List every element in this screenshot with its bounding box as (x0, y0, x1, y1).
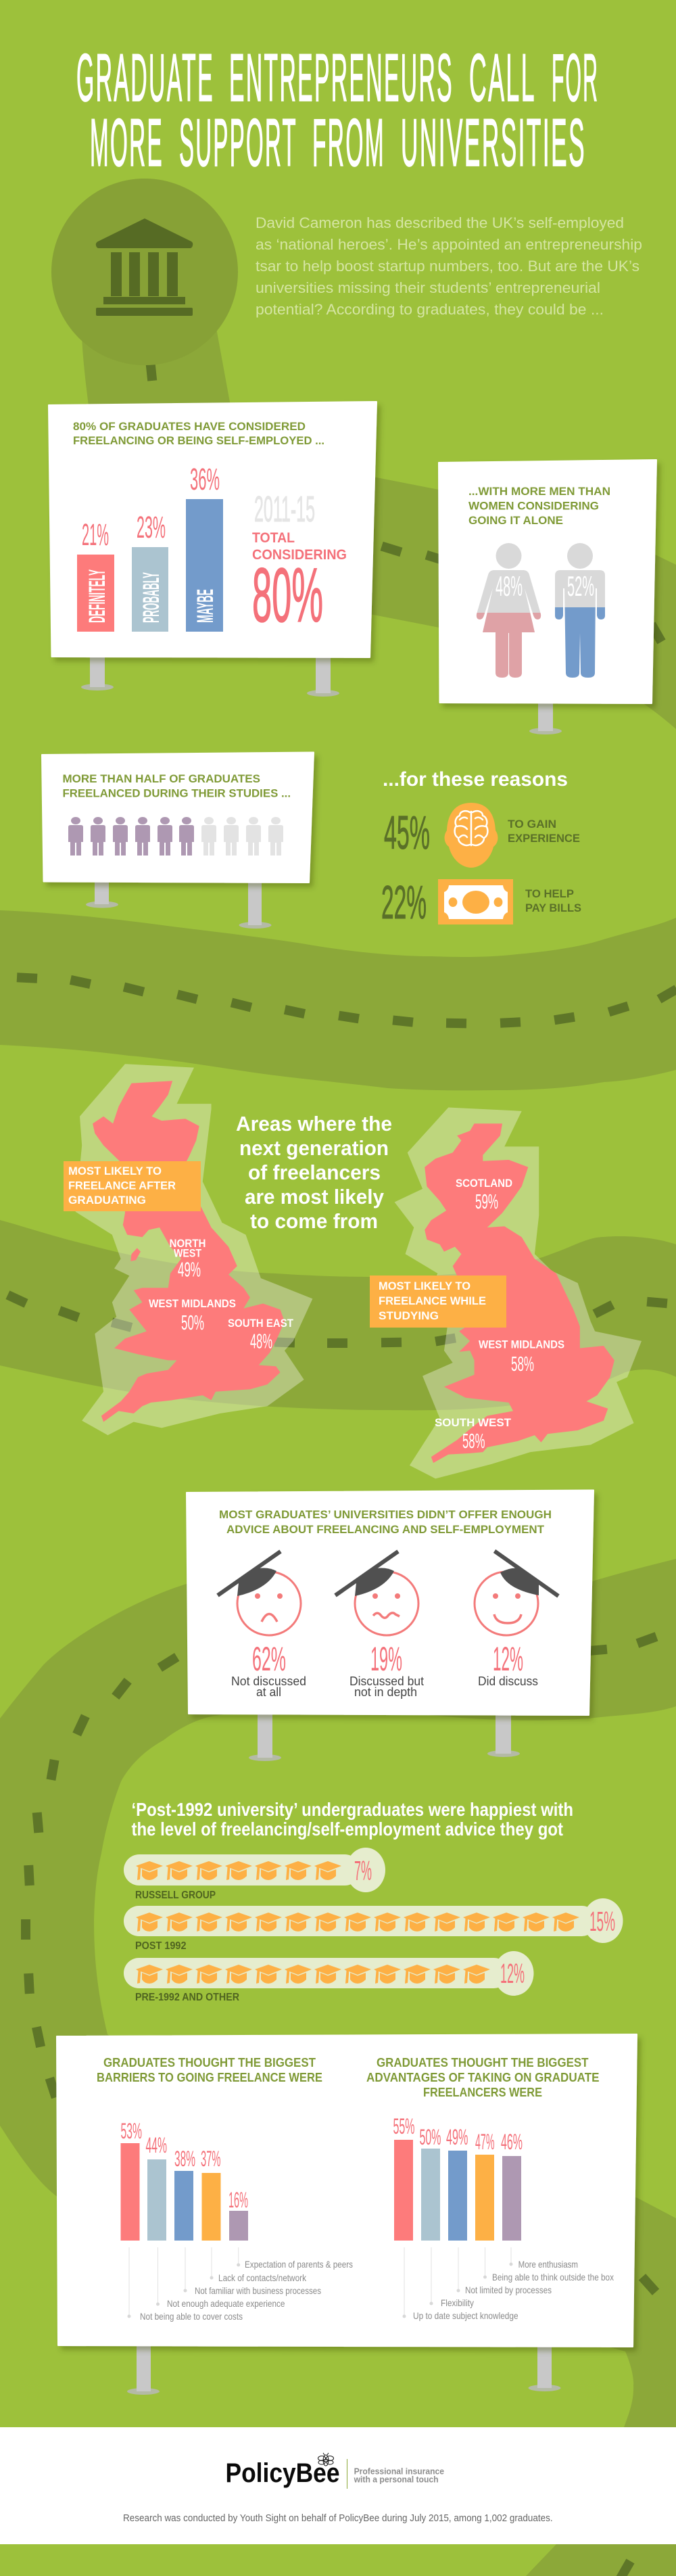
face: discussed but not in depth: Discussed but (349, 1675, 424, 1688)
stat: 22% to help pay bills: 22% (381, 876, 427, 929)
pictogram bar: Pre-1992 and other 12% (124, 1951, 534, 2003)
total considering stat (252, 489, 347, 638)
logo: PolicyBee: PolicyBee (226, 2458, 339, 2488)
bar chart: barriers: 37% (201, 2147, 220, 2171)
heading: post-1992 undergraduates: ‘Post-1992 university’ undergraduates were happiest with (131, 1799, 573, 1820)
leader labels: barriers: Not enough adequate experience (167, 2298, 285, 2309)
heading: areas where the next generation: are most likely (245, 1185, 385, 1209)
face: did discuss (475, 1551, 558, 1688)
sign: barriers and advantages (57, 2034, 637, 2395)
leader labels: barriers: Not being able to cover costs (140, 2311, 243, 2322)
intro paragraph: tsar to help boost startup numbers, too. But are the UK’s (256, 258, 639, 275)
bar chart: advantages (393, 2114, 523, 2241)
face: discussed but not in depth: 19% (370, 1640, 402, 1678)
pictogram bar: Russell Group 7%: 7% (354, 1855, 372, 1886)
callout: most likely to freelance while studying (370, 1275, 506, 1328)
title (76, 40, 599, 180)
heading: advantages: FREELANCERS WERE (423, 2086, 542, 2099)
region labels: 58% (511, 1352, 534, 1376)
title: SUPPORT (179, 105, 297, 180)
heading: advantages (366, 2056, 599, 2099)
region labels: WEST MIDLANDS (149, 1297, 236, 1310)
pictogram bar: Post 1992 15%: POST 1992 (135, 1940, 187, 1952)
face: did discuss: 12% (493, 1640, 523, 1678)
icon: woman 48%: 48% (496, 570, 523, 602)
road: upper winding section (81, 318, 676, 729)
sign: universities advice: MOST GRADUATES’ UNIVERSITIES DIDN’T OFFER ENOUGH (219, 1508, 552, 1521)
sign: freelanced during studies: MORE THAN HALF OF GRADUATES (62, 772, 260, 785)
intro paragraph: universities missing their students’ entrepreneurial (256, 279, 600, 296)
sign: more men than women: WOMEN CONSIDERING (468, 499, 599, 513)
heading: advantages: GRADUATES THOUGHT THE BIGGEST (377, 2056, 589, 2069)
total considering stat: TOTAL (252, 530, 295, 546)
stat: 45% to gain experience (384, 803, 580, 868)
stat: 22% to help pay bills (381, 876, 581, 929)
callout: most likely to freelance while studying: MOST LIKELY TO (379, 1280, 470, 1292)
callout: most likely to freelance after graduating: GRADUATING (68, 1194, 146, 1207)
face: not discussed at all (218, 1551, 306, 1699)
leader labels: advantages: Not limited by processes (465, 2285, 552, 2295)
icon: banknote (438, 879, 513, 924)
sign: 80% of graduates considered freelancing: FREELANCING OR BEING SELF-EMPLOYED ... (73, 434, 324, 447)
leader labels: advantages: More enthusiasm (518, 2259, 578, 2270)
sign: freelanced during studies (42, 752, 314, 929)
sign: barriers and advantages: 46% (501, 2130, 523, 2154)
sign: more men than women (439, 460, 656, 734)
heading: barriers: BARRIERS TO GOING FREELANCE WERE (97, 2071, 322, 2084)
map: most likely to freelance while studying (370, 1108, 642, 1478)
sign: barriers and advantages: 16% (228, 2188, 248, 2212)
sign: more men than women: ...WITH MORE MEN THAN (468, 485, 610, 498)
heading: areas where the next generation: of freelancers (248, 1161, 381, 1184)
total considering stat: 80% (252, 553, 323, 638)
title: GRADUATE (76, 40, 214, 115)
pictogram bar: Russell Group 7%: RUSSELL GROUP (135, 1890, 216, 1901)
intro paragraph: as ‘national heroes’. He’s appointed an entrepreneurship (256, 236, 642, 253)
logo: PolicyBee (226, 2453, 444, 2489)
heading: barriers: GRADUATES THOUGHT THE BIGGEST (103, 2056, 316, 2069)
region labels: SCOTLAND (456, 1177, 512, 1190)
logo: PolicyBee: Professional insurance (354, 2466, 444, 2477)
pictogram bar: Russell Group 7% (124, 1848, 385, 1901)
bar chart: advantages: 47% (475, 2130, 495, 2154)
road: band under reasons (0, 910, 676, 1090)
map: most likely to freelance after graduating (64, 1064, 312, 1435)
region labels (149, 1237, 294, 1353)
heading: post-1992 undergraduates: the level of freelancing/self-employment advice they got (131, 1819, 563, 1840)
stat: 45% to gain experience: EXPERIENCE (508, 832, 580, 845)
intro paragraph: potential? According to graduates, they could be ... (256, 301, 604, 318)
icon: woman 48% (477, 543, 541, 678)
title: MORE (90, 105, 164, 180)
icon: man 52%: 52% (567, 570, 594, 602)
region labels: SOUTH WEST (435, 1416, 512, 1429)
title: FROM (312, 105, 385, 180)
region labels: WEST (174, 1247, 202, 1259)
sign: 80% of graduates considered freelancing (49, 402, 377, 697)
bar chart: considered freelancing (77, 462, 223, 632)
heading: for these reasons: ...for these reasons (383, 768, 568, 791)
leader labels: advantages: Up to date subject knowledge (413, 2310, 518, 2321)
callout: most likely to freelance after graduating: MOST LIKELY TO (68, 1165, 162, 1177)
face: did discuss: Did discuss (478, 1675, 538, 1688)
region labels: 58% (462, 1429, 485, 1453)
icon: university building in circle (51, 179, 238, 365)
region labels (435, 1177, 564, 1453)
icon: man 52% (555, 543, 605, 678)
sign: 80% of graduates considered freelancing: 80% OF GRADUATES HAVE CONSIDERED (73, 420, 306, 433)
heading: areas where the next generation (236, 1112, 392, 1233)
callout: most likely to freelance while studying: FREELANCE WHILE (379, 1294, 486, 1307)
region labels: 59% (475, 1190, 498, 1213)
road: lower winding section (0, 1559, 676, 2576)
pictogram bar: Pre-1992 and other 12%: PRE-1992 AND OTHER (135, 1992, 239, 2003)
leader labels: barriers: Not familiar with business processes (195, 2285, 321, 2296)
face: not discussed at all: at all (256, 1685, 281, 1699)
face: not discussed at all: Not discussed (231, 1675, 306, 1688)
callout: most likely to freelance while studying: STUDYING (379, 1309, 439, 1322)
road: band behind maps (0, 1220, 676, 1410)
heading: areas where the next generation: to come from (250, 1209, 378, 1233)
research note: Research was conducted by Youth Sight on behalf of PolicyBee during July 2015, among 1,002 graduates. (123, 2512, 553, 2524)
leader labels: advantages (403, 2247, 614, 2321)
bar chart: considered freelancing: 21% (82, 517, 109, 552)
leader labels: barriers: Expectation of parents & peers (245, 2259, 353, 2270)
region labels: WEST MIDLANDS (479, 1338, 564, 1351)
heading: areas where the next generation: Areas where the (236, 1112, 392, 1135)
bar chart: considered freelancing: DEFINITELY (84, 569, 110, 623)
pictogram: six of ten people (68, 817, 283, 856)
heading: advantages: ADVANTAGES OF TAKING ON GRADUATE (366, 2071, 599, 2084)
region labels: 49% (178, 1258, 201, 1281)
icon: bee (318, 2453, 334, 2466)
bar chart: advantages: 55% (393, 2114, 415, 2138)
title: CALL (469, 40, 536, 115)
heading: barriers (97, 2056, 322, 2084)
stat: 22% to help pay bills: PAY BILLS (525, 901, 581, 914)
region labels: SOUTH EAST (228, 1317, 294, 1330)
icon: head with brain (445, 803, 498, 868)
leader labels: barriers: Lack of contacts/network (218, 2272, 307, 2283)
logo: PolicyBee: with a personal touch (354, 2474, 439, 2485)
bar chart: considered freelancing: MAYBE (193, 589, 218, 623)
region labels: NORTH (169, 1237, 206, 1250)
footer panel (0, 2427, 676, 2544)
bar chart: advantages: 49% (446, 2125, 468, 2149)
total considering stat: CONSIDERING (252, 547, 347, 563)
pictogram bar: Post 1992 15%: 15% (589, 1906, 615, 1937)
bar chart: barriers: 44% (146, 2133, 167, 2157)
region labels: 50% (181, 1311, 204, 1334)
region labels: 48% (250, 1330, 272, 1353)
sign: universities advice (187, 1491, 594, 1761)
face: discussed but not in depth: not in depth (354, 1685, 417, 1699)
pictogram bar: Pre-1992 and other 12%: 12% (500, 1958, 525, 1989)
callout: most likely to freelance after graduating: FREELANCE AFTER (68, 1179, 176, 1192)
face: not discussed at all: 62% (252, 1640, 286, 1678)
pictogram bar: Post 1992 15% (124, 1898, 623, 1952)
stat: 45% to gain experience: TO GAIN (508, 818, 556, 830)
leader labels: barriers (127, 2247, 353, 2322)
stat: 45% to gain experience: 45% (384, 806, 430, 859)
intro paragraph: David Cameron has described the UK’s self-employed (256, 214, 624, 231)
leader labels: advantages: Being able to think outside the box (492, 2272, 614, 2282)
face: discussed but not in depth (335, 1551, 424, 1699)
total considering stat: 2011-15 (254, 489, 315, 530)
sign: universities advice: ADVICE ABOUT FREELANCING AND SELF-EMPLOYMENT (226, 1523, 545, 1536)
heading: post-1992 undergraduates (131, 1799, 573, 1840)
bar chart: considered freelancing: PROBABLY (139, 572, 164, 623)
sign: more men than women: GOING IT ALONE (468, 514, 563, 527)
bar chart: advantages: 50% (419, 2125, 441, 2149)
sign: freelanced during studies: FREELANCED DURING THEIR STUDIES ... (62, 787, 291, 799)
stat: 22% to help pay bills: TO HELP (525, 887, 574, 900)
heading: areas where the next generation: next generation (239, 1136, 389, 1160)
bar chart: considered freelancing: 23% (137, 510, 166, 544)
bar chart: barriers (120, 2119, 248, 2241)
intro paragraph (256, 214, 642, 318)
bar chart: considered freelancing: 36% (190, 462, 220, 496)
bar chart: barriers: 53% (120, 2119, 142, 2143)
bar chart: barriers: 38% (174, 2147, 195, 2171)
leader labels: advantages: Flexibility (441, 2297, 474, 2308)
callout: most likely to freelance after graduating (64, 1161, 201, 1211)
